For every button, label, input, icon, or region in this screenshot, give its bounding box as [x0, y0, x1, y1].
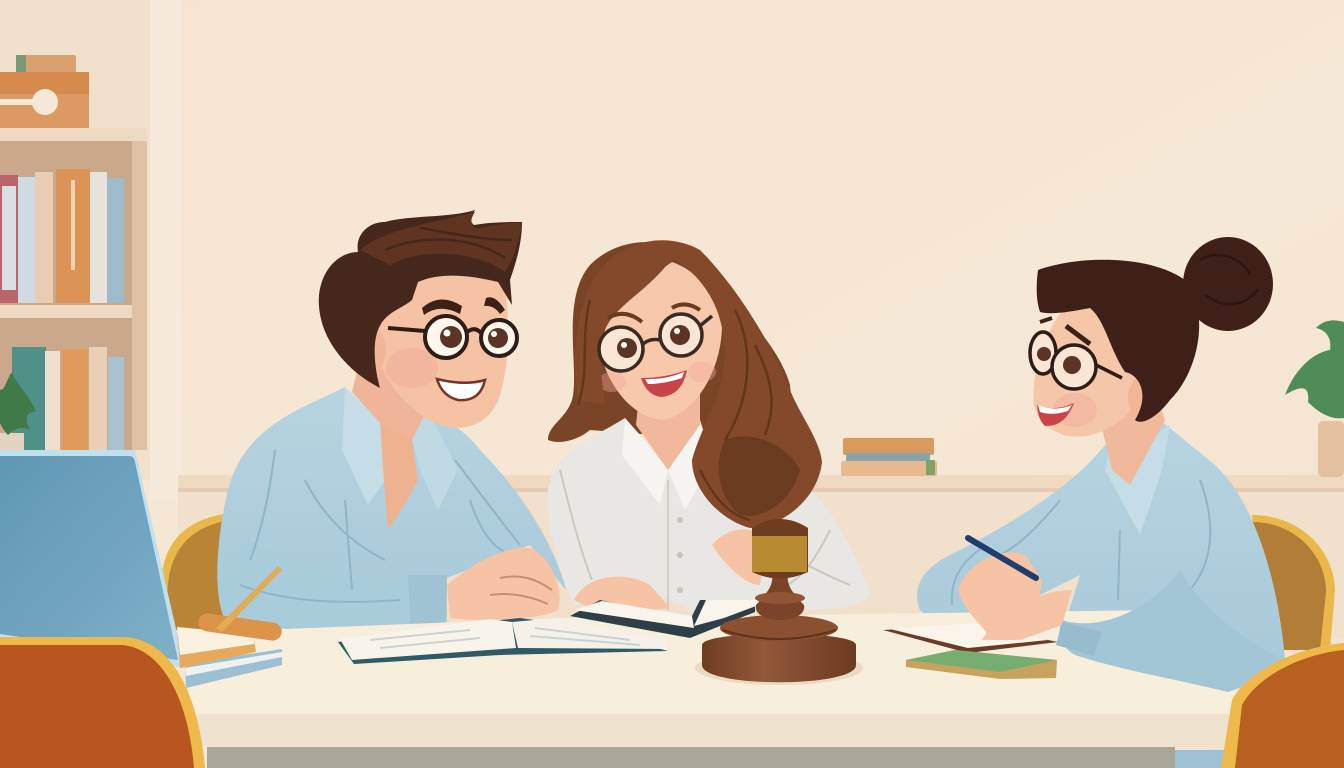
face — [1033, 295, 1150, 437]
bun — [1183, 237, 1273, 331]
face — [598, 262, 722, 420]
neck — [352, 352, 430, 440]
laptop — [0, 450, 185, 668]
hair strands — [578, 300, 772, 520]
book stack and scroll next to laptop — [177, 566, 283, 688]
books upper shelf — [0, 169, 124, 303]
gavel — [695, 519, 863, 685]
second open book — [570, 600, 758, 638]
top shelf boxes — [0, 55, 89, 128]
head — [371, 258, 508, 428]
glasses — [1030, 332, 1122, 389]
chair foreground right — [1221, 643, 1344, 768]
chair foreground left — [0, 637, 205, 768]
wall shelf with books — [178, 438, 1344, 492]
person: woman in centre — [548, 240, 870, 612]
glasses — [388, 316, 517, 358]
person: woman on right — [917, 237, 1285, 768]
back hair — [548, 242, 818, 528]
hand — [447, 548, 560, 620]
mouth — [641, 370, 687, 397]
blouse buttons — [677, 517, 683, 593]
green book — [906, 650, 1057, 679]
blouse — [548, 418, 870, 610]
chairs behind — [161, 513, 1335, 650]
glasses — [599, 314, 712, 371]
open book on table — [338, 618, 668, 664]
neck — [1100, 380, 1165, 485]
person: man on left — [217, 210, 566, 630]
books lower shelf — [12, 347, 124, 450]
eyebrows — [1040, 318, 1052, 322]
eyebrows — [608, 314, 642, 322]
bookcase — [0, 55, 147, 450]
eyebrows — [422, 299, 462, 315]
mouth — [437, 379, 485, 400]
notepad on right of table — [883, 623, 1058, 653]
hair front — [575, 240, 822, 528]
shirt folds — [952, 480, 1210, 605]
hair — [319, 210, 522, 388]
hands — [574, 577, 670, 612]
hair — [1037, 260, 1199, 422]
mouth — [1037, 403, 1074, 426]
shirt fold lines — [240, 450, 520, 602]
small plant — [0, 372, 36, 450]
torso and arms — [217, 387, 566, 630]
right figure arm and hands over table — [958, 538, 1285, 692]
torso and arms — [917, 420, 1285, 677]
table — [188, 610, 1236, 768]
plant on the right — [1285, 320, 1344, 477]
